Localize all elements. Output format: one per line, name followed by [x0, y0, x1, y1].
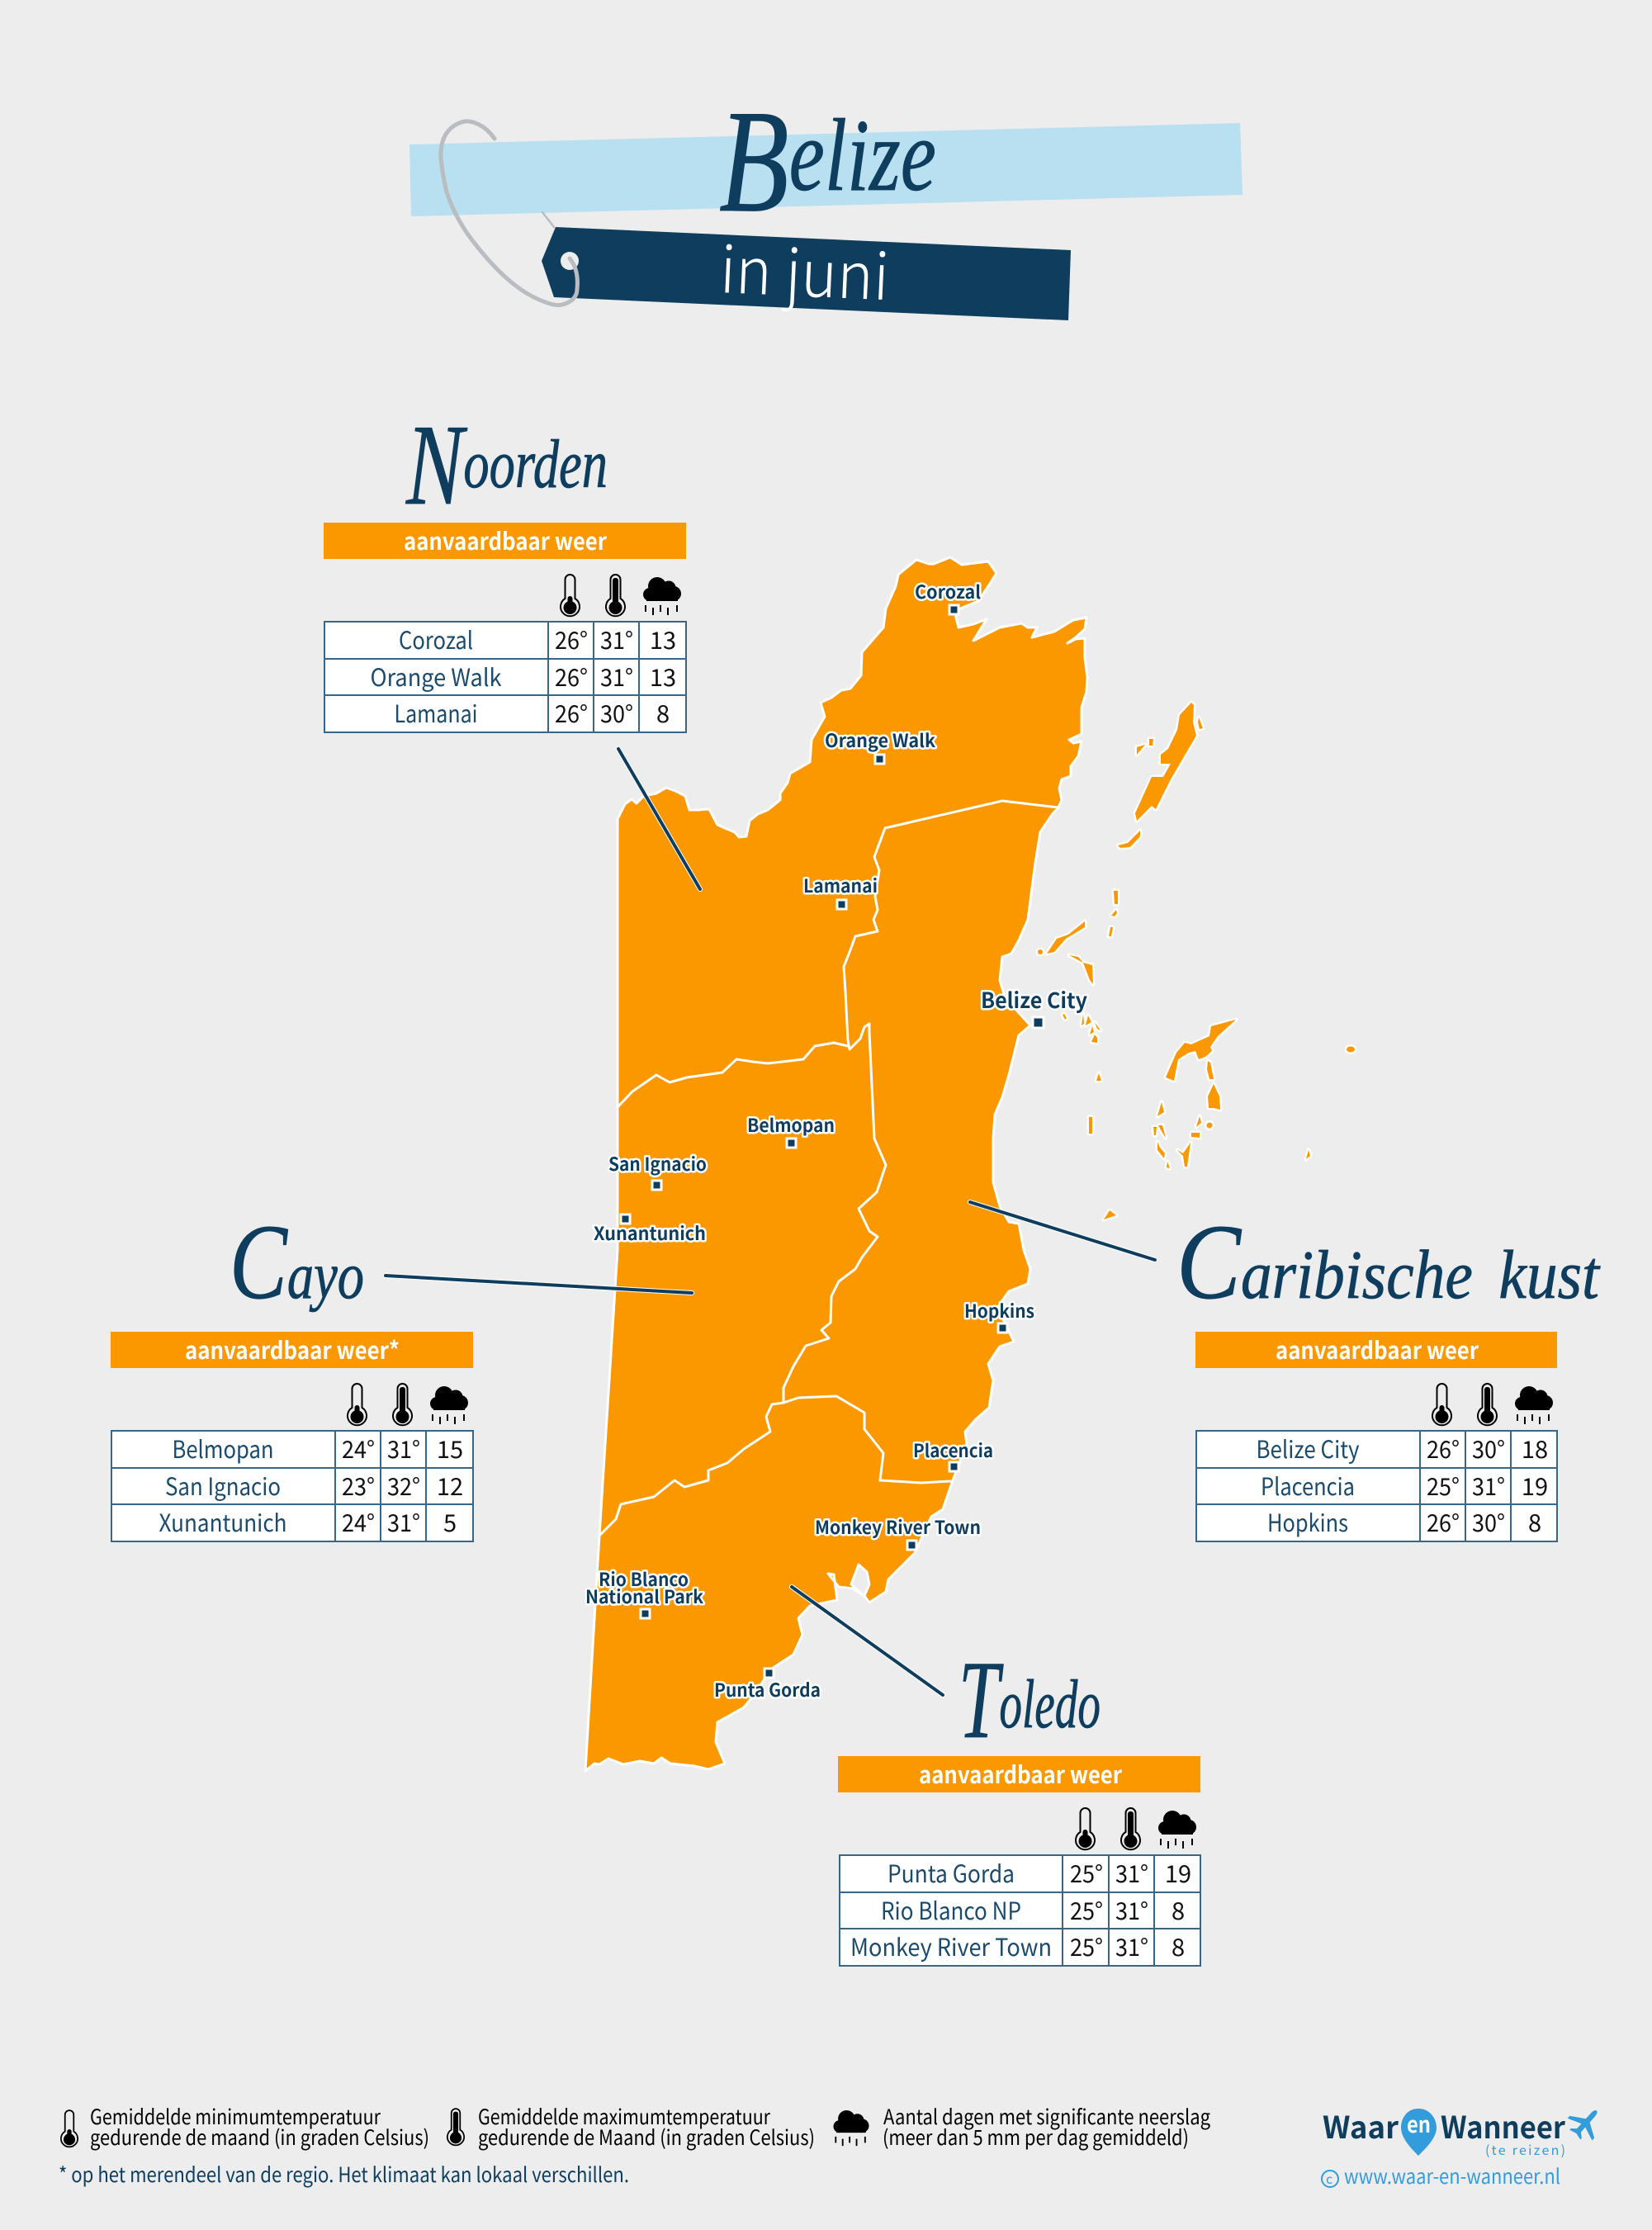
heading Cayo: Cayo	[230, 1203, 364, 1322]
icon: maximum thermometer	[1121, 1808, 1140, 1849]
city: Xunantunich: Xunantunich	[594, 1219, 706, 1246]
rating bar	[1195, 1332, 1557, 1368]
table	[1196, 1431, 1557, 1541]
table: 26°	[555, 695, 588, 730]
copyright website: c	[1326, 2168, 1332, 2188]
rating bar: aanvaardbaar weer	[1276, 1332, 1479, 1366]
table: 32°	[387, 1468, 420, 1503]
panel: Toledo	[838, 1639, 1200, 1966]
heading Toledo: oledo	[999, 1666, 1101, 1743]
table: 31°	[387, 1504, 420, 1539]
table: 26°	[555, 659, 588, 694]
logo wordmark: en	[1407, 2107, 1431, 2139]
table: 31°	[1115, 1855, 1148, 1890]
legend: maximum temperature: gedurende de Maand (in graden Celsius)	[478, 2122, 815, 2152]
icon: minimum thermometer	[348, 1384, 367, 1425]
legend: maximum temperature	[447, 2101, 815, 2152]
rating bar	[324, 523, 686, 559]
table: Corozal	[399, 622, 473, 656]
table: 31°	[600, 622, 633, 656]
table: 25°	[1070, 1855, 1103, 1890]
tag hole	[561, 252, 579, 270]
city: Orange Walk: Orange Walk	[825, 727, 936, 753]
table: 12	[437, 1468, 463, 1503]
heading Noorden: oorden	[463, 426, 608, 503]
table: 26°	[1427, 1431, 1460, 1465]
legend: minimum temperature: Gemiddelde minimumtemperatuur	[90, 2101, 381, 2131]
table: 25°	[1427, 1468, 1460, 1503]
city: Monkey River Town: Monkey River Town	[815, 1513, 981, 1540]
table: 13	[650, 622, 676, 656]
city: San Ignacio: San Ignacio	[608, 1150, 707, 1177]
heading Caribische kust: Caribische kust	[1176, 1203, 1601, 1322]
legend: precipitation: Aantal dagen met significante neerslag	[883, 2101, 1210, 2131]
city: Lamanai	[803, 872, 878, 909]
rating bar	[111, 1332, 473, 1368]
title Belize: B	[719, 79, 789, 243]
logo tagline: (te reizen)	[1485, 2139, 1565, 2159]
table: 19	[1165, 1855, 1191, 1890]
table: 25°	[1070, 1892, 1103, 1927]
table: 31°	[1472, 1468, 1505, 1503]
table: 23°	[342, 1468, 375, 1503]
icon: maximum thermometer	[606, 575, 625, 616]
cayes and islands	[1038, 703, 1355, 1219]
legend: minimum temperature: gedurende de maand (in graden Celsius)	[90, 2122, 429, 2152]
table: 8	[1172, 1892, 1185, 1927]
table: Punta Gorda	[888, 1855, 1015, 1890]
table: 8	[1172, 1929, 1185, 1963]
heading Toledo: T	[959, 1639, 1004, 1762]
legend	[59, 2101, 1210, 2189]
district borders	[599, 801, 1058, 1536]
city: Hopkins: Hopkins	[964, 1297, 1034, 1323]
table: 18	[1522, 1431, 1548, 1465]
mainland	[585, 557, 1087, 1771]
logo plane	[1563, 2100, 1609, 2146]
table: Belmopan	[172, 1431, 274, 1465]
icon: maximum thermometer	[393, 1384, 412, 1425]
city: San Ignacio	[608, 1150, 707, 1190]
logo wordmark: Waar	[1323, 2103, 1399, 2147]
logo wordmark: Wanneer	[1441, 2103, 1566, 2147]
footnote: * op het merendeel van de regio. Het klimaat kan lokaal verschillen.	[59, 2159, 629, 2189]
table: 31°	[387, 1431, 420, 1465]
table: 8	[1528, 1504, 1541, 1539]
table: 31°	[1115, 1892, 1148, 1927]
table: San Ignacio	[165, 1468, 281, 1503]
table: 31°	[1115, 1929, 1148, 1963]
table: 15	[437, 1431, 463, 1465]
icon: maximum thermometer	[1478, 1384, 1497, 1425]
legend: minimum temperature	[61, 2101, 429, 2152]
table: Xunantunich	[159, 1504, 287, 1539]
price tag dark blue	[542, 227, 1071, 320]
icon: minimum thermometer	[1432, 1384, 1451, 1425]
table: 26°	[555, 622, 588, 656]
table: 19	[1522, 1468, 1548, 1503]
icon: minimum thermometer	[561, 575, 580, 616]
city: Rio Blanco National Park: Rio Blanco	[599, 1565, 689, 1592]
leader line: Noorden	[618, 749, 700, 889]
title Belize: elize	[789, 99, 936, 213]
city: Punta Gorda: Punta Gorda	[714, 1676, 821, 1702]
legend: precipitation: (meer dan 5 mm per dag gemiddeld)	[883, 2122, 1189, 2152]
icon: minimum thermometer	[1076, 1808, 1095, 1849]
city: Placencia: Placencia	[913, 1437, 993, 1463]
logo: Waar en Wanneer	[1322, 2100, 1609, 2190]
table: 30°	[600, 695, 633, 730]
table	[324, 622, 686, 732]
map of Belize	[585, 557, 1355, 1771]
table: Belize City	[1257, 1431, 1359, 1465]
table: 8	[656, 695, 670, 730]
table: 24°	[342, 1504, 375, 1539]
table: 13	[650, 659, 676, 694]
icon: rain cloud	[1158, 1811, 1196, 1849]
table: 25°	[1070, 1929, 1103, 1963]
leader line: Cayo	[386, 1276, 692, 1293]
table: Monkey River Town	[850, 1929, 1052, 1963]
title block	[409, 79, 1243, 320]
icon: rain cloud	[643, 577, 681, 615]
table: 31°	[600, 659, 633, 694]
rating bar: aanvaardbaar weer*	[185, 1332, 400, 1366]
table	[840, 1855, 1200, 1966]
legend: precipitation	[833, 2101, 1210, 2152]
city: Corozal: Corozal	[915, 578, 981, 604]
table: Placencia	[1261, 1468, 1355, 1503]
leader line: Caribische kust	[970, 1202, 1155, 1260]
city: Lamanai: Lamanai	[803, 872, 878, 898]
table: Lamanai	[395, 695, 477, 730]
table: 30°	[1472, 1431, 1505, 1465]
legend: maximum temperature: Gemiddelde maximumtemperatuur	[478, 2101, 770, 2131]
copyright website: www.waar-en-wanneer.nl	[1344, 2161, 1560, 2190]
table: 24°	[342, 1431, 375, 1465]
rating bar: aanvaardbaar weer	[404, 523, 607, 557]
estuary	[851, 1565, 869, 1596]
city: Rio Blanco National Park: National Park	[585, 1583, 704, 1609]
panel: Cayo	[111, 1203, 473, 1541]
city: Belize City: Belize City	[981, 984, 1087, 1015]
icon: rain cloud	[430, 1386, 468, 1424]
panel: Noorden	[324, 401, 686, 732]
rating bar	[838, 1756, 1200, 1792]
tag string	[441, 121, 577, 305]
subtitle in juni: in juni	[718, 219, 892, 319]
table	[111, 1431, 473, 1541]
table: Rio Blanco NP	[881, 1892, 1021, 1927]
heading Noorden: N	[405, 401, 467, 529]
logo wordmark	[1323, 2103, 1566, 2147]
title ribbon light blue	[409, 123, 1243, 216]
table: Orange Walk	[370, 659, 502, 694]
panel: Caribische kust	[1176, 1203, 1601, 1541]
rating bar: aanvaardbaar weer	[919, 1756, 1122, 1791]
icon: rain cloud	[1515, 1386, 1553, 1424]
logo pin	[1401, 2109, 1437, 2156]
city: Rio Blanco National Park	[585, 1565, 704, 1618]
table: Hopkins	[1267, 1504, 1348, 1539]
leader line: Toledo	[792, 1587, 943, 1695]
table: 30°	[1472, 1504, 1505, 1539]
table: 5	[443, 1504, 457, 1539]
city: Belmopan: Belmopan	[747, 1111, 835, 1138]
city: Belize City	[981, 984, 1087, 1028]
table: 26°	[1427, 1504, 1460, 1539]
